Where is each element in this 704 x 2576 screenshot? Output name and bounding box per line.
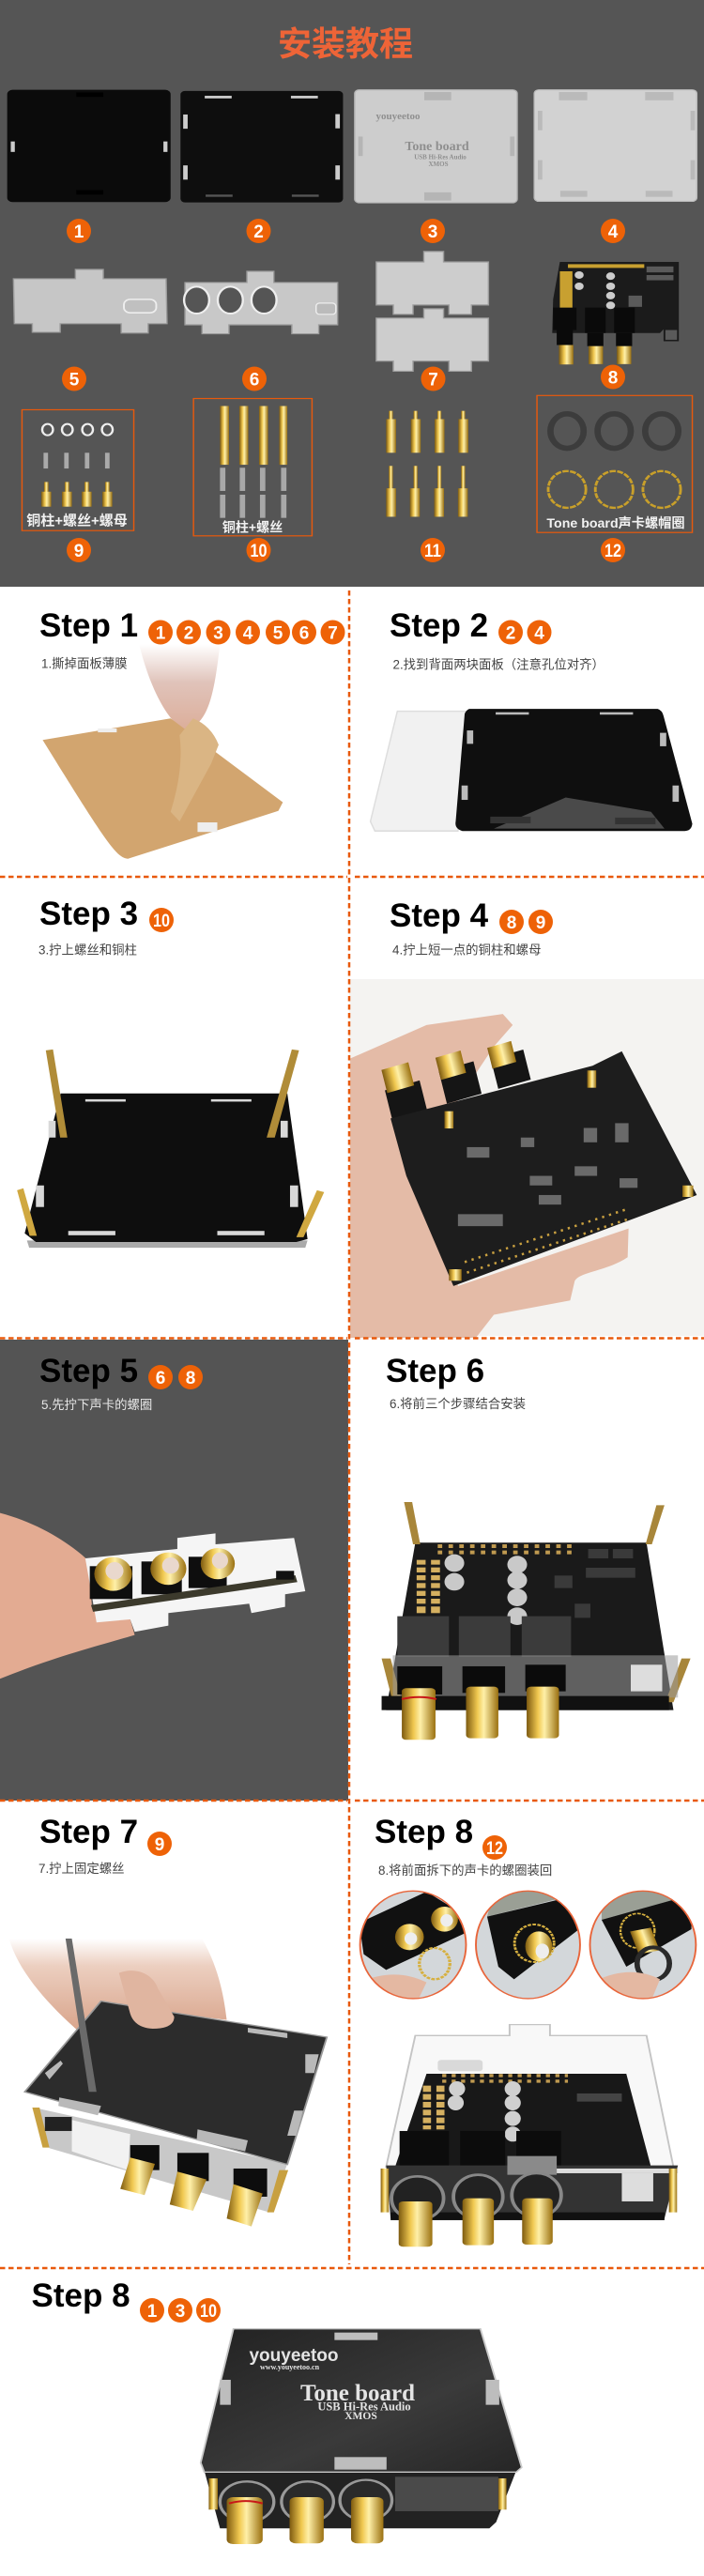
step 1 heading: 4 bbox=[243, 623, 253, 644]
step 1 heading: 1 bbox=[156, 623, 166, 644]
step 1 heading bbox=[39, 607, 345, 644]
photo: hand with front panel bbox=[0, 1513, 305, 1679]
product engraving bbox=[249, 2346, 415, 2422]
part number badges: 11 bbox=[424, 542, 441, 561]
step 8 caption: 8.将前面拆下的声卡的螺圈装回 bbox=[378, 1863, 552, 1878]
product engraving: XMOS bbox=[344, 2411, 377, 2422]
step 1 caption: 1.撕掉面板薄膜 bbox=[41, 657, 128, 670]
step 5 caption: 5.先拧下声卡的螺圈 bbox=[41, 1398, 152, 1412]
panel 3 engraving: Tone board bbox=[405, 140, 469, 154]
step 5 heading: 8 bbox=[186, 1369, 195, 1388]
step 4 heading: 8 bbox=[507, 913, 516, 933]
step 2 caption: 2.找到背面两块面板（注意孔位对齐） bbox=[392, 657, 605, 672]
illustrations, steps 1 to 4 bbox=[17, 644, 696, 1338]
step 3 heading: Step 3 bbox=[39, 896, 138, 932]
step 2 heading: 2 bbox=[506, 623, 515, 644]
part number badges: 4 bbox=[608, 222, 619, 242]
part number badges: 7 bbox=[428, 370, 438, 391]
panel: step 5 dark background bbox=[0, 1340, 348, 1801]
step 8 heading: Step 8 bbox=[375, 1814, 473, 1850]
photo: peeling film bbox=[42, 644, 283, 859]
final step heading: 1 bbox=[147, 2302, 158, 2322]
product engraving: USB Hi-Res Audio bbox=[317, 2400, 411, 2413]
part 3: clear top plate bbox=[355, 90, 517, 203]
part labels: 铜柱+螺丝+螺母 bbox=[26, 513, 128, 529]
title: 安装教程 bbox=[278, 24, 413, 63]
part 12: nut rings box bbox=[537, 395, 693, 532]
step 7 heading bbox=[39, 1814, 172, 1856]
panel 3 engraving: USB Hi-Res Audio bbox=[414, 154, 467, 161]
part 2: black bottom plate bbox=[180, 91, 343, 203]
part 7: two side panels bbox=[376, 252, 488, 371]
part labels bbox=[26, 513, 685, 535]
part number badges: 9 bbox=[74, 542, 84, 561]
panel: parts overview bbox=[0, 0, 704, 587]
panel: step 4 photo background bbox=[349, 979, 704, 1336]
final step heading: 10 bbox=[200, 2302, 217, 2322]
step 4 heading: Step 4 bbox=[390, 897, 489, 934]
part 5: side panel bbox=[13, 269, 167, 333]
part number badges: 5 bbox=[69, 370, 80, 391]
panel 3 engraving: XMOS bbox=[428, 161, 449, 168]
product engraving: youyeetoo bbox=[249, 2346, 339, 2366]
step 2 heading: Step 2 bbox=[390, 607, 488, 644]
part number badges: 3 bbox=[428, 222, 437, 242]
detail photo: nut bbox=[589, 1891, 696, 2001]
part number badges: 2 bbox=[253, 222, 264, 242]
part number badges: 8 bbox=[608, 368, 618, 389]
step 4 heading bbox=[390, 897, 553, 934]
step 2 heading bbox=[390, 607, 552, 644]
step 8 heading: 12 bbox=[486, 1839, 503, 1859]
step 4 caption: 4.拧上短一点的铜柱和螺母 bbox=[392, 943, 541, 958]
final step heading bbox=[32, 2277, 221, 2323]
final step heading: 3 bbox=[176, 2302, 185, 2322]
step 3 caption: 3.拧上螺丝和铜柱 bbox=[38, 943, 137, 958]
step 6 heading: Step 6 bbox=[386, 1353, 484, 1389]
product engraving: www.youyeetoo.cn bbox=[260, 2363, 320, 2371]
step 1 heading: Step 1 bbox=[39, 607, 138, 644]
step 1 heading: 3 bbox=[213, 623, 223, 644]
step 1 heading: 2 bbox=[184, 623, 193, 644]
part 4: clear bottom plate bbox=[534, 90, 696, 201]
step 2 heading: 4 bbox=[534, 623, 544, 644]
part number badges: 1 bbox=[74, 222, 84, 242]
part labels: 铜柱+螺丝 bbox=[222, 520, 283, 535]
detail photo: washer bbox=[360, 1891, 467, 2001]
photo: two plates bbox=[371, 709, 693, 831]
step 5 heading: 6 bbox=[156, 1369, 165, 1388]
part 1: black top plate bbox=[8, 90, 171, 202]
step 7 caption: 7.拧上固定螺丝 bbox=[38, 1862, 125, 1876]
part number badges: 12 bbox=[605, 542, 621, 561]
step 7 heading: Step 7 bbox=[39, 1814, 138, 1850]
detail photo: washer fitted bbox=[476, 1891, 580, 1999]
part 10: long standoffs box bbox=[193, 399, 312, 536]
illustrations, steps 5 and 6 bbox=[0, 1502, 691, 1740]
step 1 heading: 6 bbox=[299, 623, 309, 644]
product engraving: Tone board bbox=[300, 2381, 415, 2406]
part 8: sound card board bbox=[552, 262, 679, 364]
step 6 caption: 6.将前三个步骤结合安装 bbox=[390, 1396, 526, 1411]
photo: plate with standoffs bbox=[17, 1050, 324, 1248]
step 5 heading: Step 5 bbox=[39, 1353, 138, 1389]
part drawings bbox=[8, 90, 696, 536]
part number badges: 10 bbox=[250, 542, 267, 561]
step 3 heading: 10 bbox=[153, 912, 170, 931]
dashed grid dividers bbox=[0, 590, 704, 2268]
step 7 heading: 9 bbox=[155, 1835, 164, 1855]
panel 3 engraving: youyeetoo bbox=[375, 111, 421, 122]
photo: screwdriver on assembled case bbox=[9, 1939, 327, 2227]
panel 3 engraving bbox=[375, 111, 469, 168]
step 8 heading bbox=[375, 1814, 507, 1860]
photo: finished product bbox=[201, 2329, 522, 2544]
photo: hand holding board bbox=[350, 1014, 696, 1338]
part labels: Tone board声卡螺帽圈 bbox=[546, 515, 685, 531]
part 9: fasteners box bbox=[22, 409, 134, 530]
step 5 heading bbox=[39, 1353, 203, 1389]
illustration, final step bbox=[201, 2329, 522, 2544]
part number badges: 6 bbox=[250, 370, 259, 391]
step 1 heading: 7 bbox=[328, 623, 338, 644]
photo: board on bottom plate bbox=[382, 1502, 691, 1740]
part 11: short standoffs bbox=[386, 411, 468, 516]
step 4 heading: 9 bbox=[536, 913, 545, 933]
photo: board in clear case bbox=[381, 2025, 678, 2246]
final step heading: Step 8 bbox=[32, 2277, 130, 2314]
step 1 heading: 5 bbox=[273, 623, 283, 644]
part number badges bbox=[62, 219, 625, 562]
illustrations, steps 7 and 8 bbox=[9, 1891, 696, 2246]
part 6: front panel with holes bbox=[184, 271, 338, 334]
